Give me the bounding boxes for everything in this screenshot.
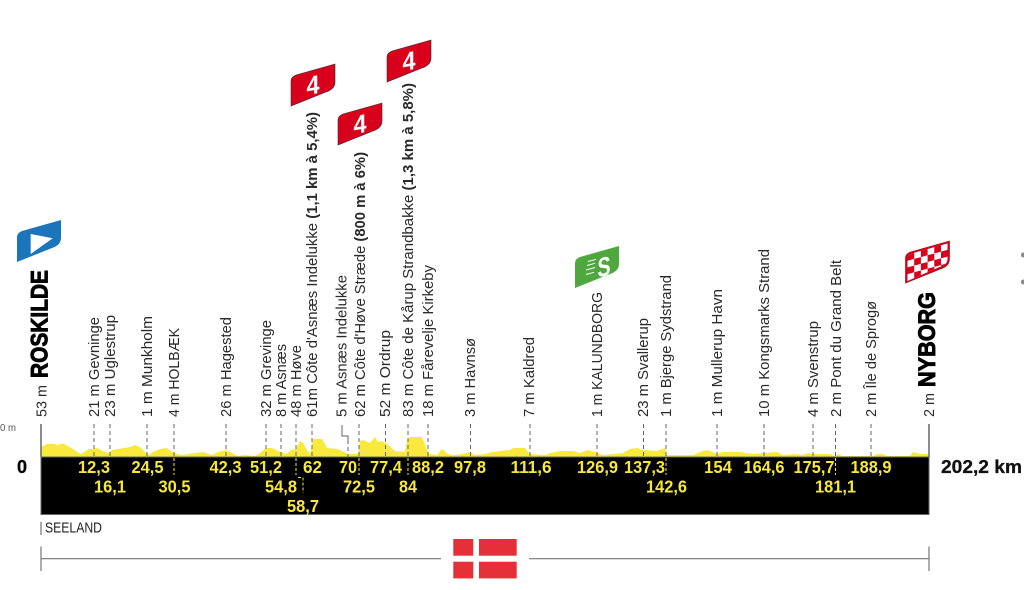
altitude and place labels bbox=[34, 83, 938, 417]
distance numbers: 137,3 bbox=[624, 457, 665, 477]
cropped marks at right edge bbox=[1021, 252, 1024, 284]
altitude and place labels: 2 m bbox=[922, 393, 938, 417]
distance numbers: 70 bbox=[339, 457, 357, 477]
altitude and place labels: 83 m Côte de Kårup Strandbakke (1,3 km à 5,8%) bbox=[401, 83, 417, 417]
altitude and place labels: 2 m Pont du Grand Belt bbox=[829, 260, 845, 417]
distance numbers: 88,2 bbox=[412, 457, 444, 477]
altitude and place labels: 62 m Côte d'Høve Stræde (800 m à 6%) bbox=[353, 152, 369, 417]
altitude and place labels: 32 m Grevinge bbox=[259, 320, 275, 417]
distance numbers: 126,9 bbox=[577, 457, 618, 477]
altitude and place labels: 5 m Asnæs Indelukke bbox=[334, 275, 350, 417]
climb and place marker dashed lines bbox=[94, 424, 871, 457]
distance numbers: 111,6 bbox=[510, 457, 552, 477]
distance numbers: 181,1 bbox=[815, 476, 856, 496]
icon: climb flag 3 bbox=[387, 40, 431, 82]
elevation profile area bbox=[41, 437, 929, 457]
icon: climb flag 1: 4 bbox=[306, 69, 320, 101]
distance numbers: 30,5 bbox=[158, 476, 191, 496]
altitude and place labels: 8 m Asnæs bbox=[274, 344, 290, 417]
altitude and place labels: 23 m Svallerup bbox=[636, 318, 652, 417]
start distance: 0 bbox=[17, 457, 27, 477]
altitude and place labels: 48 m Høve bbox=[289, 345, 305, 417]
altitude and place labels: 61m Côte d'Asnæs Indelukke (1,1 km à 5,4%) bbox=[305, 112, 321, 417]
distance numbers: 54,8 bbox=[265, 476, 297, 496]
distance numbers: 72,5 bbox=[343, 476, 375, 496]
black distance band bbox=[41, 457, 929, 514]
distance numbers: 175,7 bbox=[794, 457, 834, 477]
distance numbers: 188,9 bbox=[850, 457, 892, 477]
yellow ticks inside distance band bbox=[174, 458, 836, 493]
altitude and place labels: 53 m bbox=[34, 385, 50, 417]
distance numbers bbox=[78, 457, 892, 516]
altitude and place labels: 2 m Île de Sprogø bbox=[863, 301, 880, 417]
altitude and place labels: 26 m Hagested bbox=[219, 317, 235, 417]
distance numbers: 77,4 bbox=[370, 457, 402, 477]
distance numbers: 42,3 bbox=[210, 457, 242, 477]
altitude and place labels: 21 m Gevninge bbox=[87, 317, 103, 417]
altitude scale label: 0 m bbox=[0, 423, 16, 434]
distance numbers: 154 bbox=[704, 457, 732, 477]
altitude and place labels: 4 m Svenstrup bbox=[806, 321, 822, 417]
country span line bbox=[41, 546, 929, 571]
altitude and place labels: 1 m KALUNDBORG bbox=[590, 292, 606, 417]
finish town: NYBORG bbox=[914, 292, 941, 387]
icon: sprint flag bbox=[575, 246, 619, 288]
icon: Danish flag bbox=[453, 539, 517, 578]
distance numbers: 142,6 bbox=[646, 476, 687, 496]
distance numbers: 97,8 bbox=[454, 457, 486, 477]
distance numbers: 24,5 bbox=[132, 457, 164, 477]
start and finish altitude axes bbox=[41, 424, 929, 457]
altitude and place labels: 1 m Munkholm bbox=[140, 316, 156, 417]
altitude and place labels: 10 m Kongsmarks Strand bbox=[757, 249, 773, 417]
total distance: 202,2 km bbox=[941, 457, 1022, 477]
icon: start flag bbox=[17, 220, 61, 262]
icon: finish flag bbox=[906, 241, 950, 283]
marker offset for Asnæs Indelukke bbox=[342, 425, 348, 440]
altitude and place labels: 23 m Uglestrup bbox=[103, 315, 119, 417]
distance numbers: 16,1 bbox=[94, 476, 126, 496]
distance numbers: 58,7 bbox=[287, 496, 319, 516]
icon: climb flag 1 bbox=[291, 64, 335, 106]
icon: climb flag 3: 4 bbox=[402, 45, 416, 77]
distance numbers: 51,2 bbox=[250, 457, 282, 477]
icon: climb flag 2: 4 bbox=[354, 108, 367, 140]
start town: ROSKILDE bbox=[26, 270, 54, 378]
altitude and place labels: 1 m Bjerge Sydstrand bbox=[659, 275, 675, 417]
distance numbers: 84 bbox=[399, 476, 417, 496]
altitude and place labels: 3 m Havnsø bbox=[463, 338, 479, 417]
distance numbers: 164,6 bbox=[744, 457, 785, 477]
altitude and place labels: 52 m Ordrup bbox=[378, 330, 394, 417]
region label: SEELAND bbox=[45, 520, 102, 536]
icon: climb flag 2 bbox=[338, 103, 382, 145]
altitude and place labels: 18 m Fårevelje Kirkeby bbox=[421, 264, 437, 417]
distance numbers: 62 bbox=[303, 457, 322, 477]
distance numbers: 12,3 bbox=[78, 457, 110, 477]
altitude and place labels: 4 m HOLBÆK bbox=[167, 328, 183, 417]
altitude and place labels: 7 m Kaldred bbox=[522, 337, 538, 417]
altitude and place labels: 1 m Mullerup Havn bbox=[710, 289, 726, 417]
icon: sprint flag: S bbox=[598, 250, 610, 284]
